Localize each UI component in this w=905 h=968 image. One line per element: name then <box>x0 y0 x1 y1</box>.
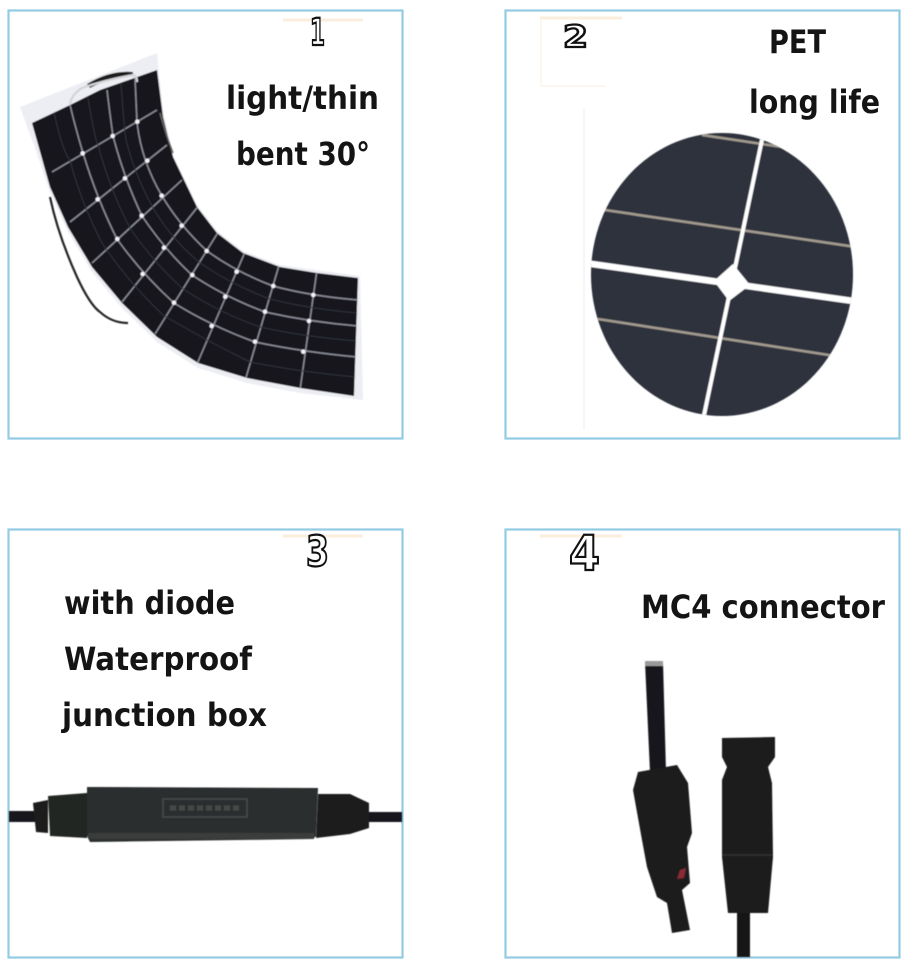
heading: bent 30 degrees: bent 30° <box>236 135 370 173</box>
heading: light/thin: light/thin <box>226 79 379 117</box>
panel 2: PET long life <box>506 10 900 438</box>
image: bent flexible solar panel <box>20 53 363 400</box>
heading: with diode: with diode <box>64 584 235 622</box>
heading: long life: long life <box>749 83 880 121</box>
heading: MC4 connector: MC4 connector <box>641 588 885 626</box>
heading: Waterproof: Waterproof <box>64 640 253 678</box>
image: inline junction box with cables <box>9 787 402 842</box>
number 4: 4 <box>569 526 600 582</box>
image: circular close-up of PET solar cell <box>585 133 860 420</box>
number 3: 3 <box>306 527 329 576</box>
heading: PET: PET <box>769 23 826 61</box>
number 2: 2 <box>563 20 588 55</box>
panel 3: diode and waterproof junction box <box>8 527 402 958</box>
number 1: 1 <box>310 11 325 54</box>
panel 1: light and thin, bent 30 degrees <box>8 10 402 438</box>
heading: junction box: junction box <box>60 696 267 734</box>
panel 4: MC4 connector <box>506 526 900 958</box>
image: male and female MC4 connectors <box>633 661 775 957</box>
